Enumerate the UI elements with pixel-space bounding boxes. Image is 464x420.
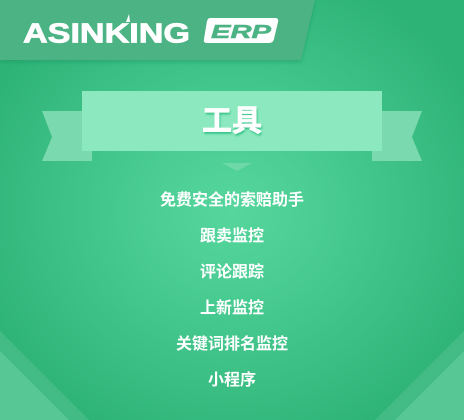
- ERP badge: ERP: [211, 22, 273, 42]
- list item: listing monitor: 跟卖监控: [200, 228, 264, 245]
- logo leaf accent: [126, 14, 130, 22]
- title ribbon: [42, 91, 422, 171]
- list item: mini program: 小程序: [208, 372, 256, 389]
- list item: claims assistant: 免费安全的索赔助手: [160, 192, 304, 209]
- list item: keyword rank monitor: 关键词排名监控: [176, 336, 288, 353]
- list item: new listing monitor: 上新监控: [200, 300, 264, 317]
- ERP badge: [204, 18, 278, 43]
- heading: 工具: [202, 105, 262, 138]
- list item: review tracking: 评论跟踪: [200, 264, 264, 281]
- header logo bar: [0, 0, 315, 63]
- logo wordmark: ASINKING: [23, 18, 190, 48]
